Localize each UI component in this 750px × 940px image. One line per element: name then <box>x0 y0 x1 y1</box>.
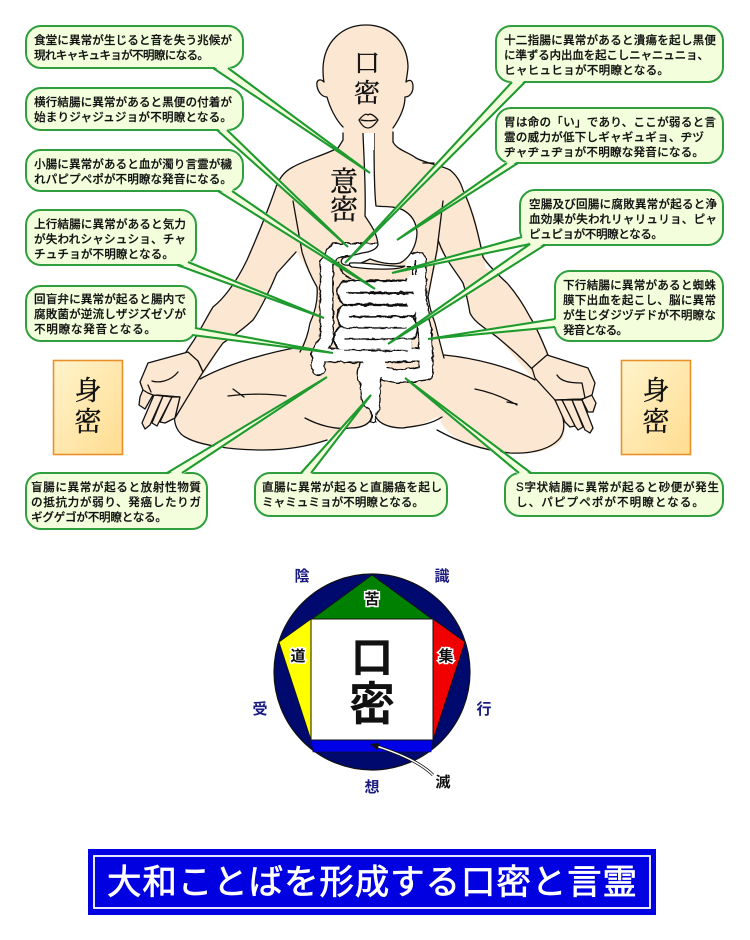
green segment: ku <box>312 575 432 619</box>
five aggregates labels: 受 <box>252 700 268 718</box>
callout: jejunum and ileum <box>388 190 723 344</box>
callout: descending colon: が生じダジヅデドが不明瞭な <box>563 308 716 322</box>
red segment: shu: 集 <box>438 647 454 665</box>
green segment: ku: 苦 <box>364 591 380 608</box>
small intestine center lines <box>345 281 408 351</box>
white square with kumitsu: 密 <box>349 678 395 730</box>
label: imitsu on chest <box>330 166 359 226</box>
callout: ascending colon <box>26 210 324 318</box>
callout: transverse colon: 始まりジャジュジョが不明瞭となる。 <box>34 110 232 124</box>
five aggregates labels: 想 <box>364 779 380 796</box>
callout: ascending colon: が失われシャシュショ、チャ <box>34 232 186 246</box>
callout: sigmoid colon: し、パピプペポが不明瞭となる。 <box>516 495 704 509</box>
seated human figure <box>139 25 596 470</box>
large intestine and small intestine casing <box>318 250 427 377</box>
callout: rectum: ミャミュミョが不明瞭となる。 <box>262 495 424 509</box>
five aggregates labels: 行 <box>476 701 492 718</box>
title banner: 大和ことばを形成する口密と言霊 <box>107 864 637 902</box>
five aggregates labels: 陰 <box>294 567 310 585</box>
panel: left shinmitsu <box>54 360 122 454</box>
callout: rectum: 直腸に異常が起ると直腸癌を起し <box>262 480 442 494</box>
callout: descending colon <box>428 271 723 341</box>
callout: stomach <box>397 108 723 240</box>
label: imitsu on chest: 密 <box>330 194 358 226</box>
white square with kumitsu: 口 <box>351 634 393 681</box>
callout: cecum <box>26 377 327 529</box>
callout: stomach: ヂャヂュヂョが不明瞭な発音になる。 <box>504 145 704 159</box>
callout: stomach: 胃は命の「い」であり、ここが弱ると言 <box>504 115 716 129</box>
five aggregates labels: 識 <box>434 568 450 585</box>
label: metsu: 滅 <box>435 774 451 791</box>
callout: cecum: ギグゲゴが不明瞭となる。 <box>31 510 167 524</box>
lips <box>359 114 378 128</box>
callout: ileocecal valve: 回盲弁に異常が起ると腸内で <box>34 292 186 306</box>
yellow segment: do <box>279 619 311 740</box>
callout: small intestine: 小腸に異常があると血が濁り言霊が穢 <box>34 157 232 171</box>
callout: descending colon: 下行結腸に異常があると蜘蛛 <box>563 278 716 292</box>
callout: jejunum and ileum: 血効果が失われリャリュリョ、ピャ <box>529 212 717 226</box>
callout: ileocecal valve <box>26 286 333 353</box>
callout: cecum: 盲腸に異常が起ると放射性物質 <box>31 480 201 494</box>
callout: sigmoid colon: S字状結腸に異常が起ると砂便が発生 <box>516 480 719 494</box>
five aggregates labels <box>252 567 492 796</box>
callout: cecum: の抵抗力が弱り、発癌したりガ <box>31 495 201 509</box>
white square with kumitsu <box>311 619 433 740</box>
callout: stomach: 霊の威力が低下しギャギュギョ、ヂヅ <box>504 130 704 144</box>
title banner <box>88 849 656 915</box>
red segment: shu <box>433 619 465 740</box>
callout: duodenum: 十二指腸に異常があると潰瘍を起し黒便 <box>504 33 716 47</box>
navy circle <box>274 574 470 770</box>
callout: small intestine: れパピプペポが不明瞭な発音になる。 <box>34 172 232 186</box>
blue segment: metsu <box>311 740 433 752</box>
panel: right shinmitsu: 身 <box>642 376 670 406</box>
panel: right shinmitsu <box>622 360 690 454</box>
callout: duodenum: ヒャヒュヒョが不明瞭となる。 <box>504 63 669 77</box>
label: imitsu on chest: 意 <box>330 166 359 198</box>
rectum <box>357 362 381 422</box>
callout: jejunum and ileum: 空腸及び回腸に腐敗異常が起ると浄 <box>529 197 717 211</box>
callout: esophagus: 現れキャキュキョが不明瞭になる。 <box>34 48 209 62</box>
callout: ascending colon: チュチョが不明瞭となる。 <box>34 247 174 261</box>
diagram: circle and pentagon <box>274 574 470 770</box>
icon: right hand <box>532 355 596 433</box>
label: kumitsu on head: 密 <box>354 79 380 108</box>
digestive tract <box>318 250 427 422</box>
body outline <box>175 25 564 453</box>
callout: rectum <box>255 395 447 516</box>
callout: ileocecal valve: 不明瞭な発音となる。 <box>34 322 156 336</box>
panel: left shinmitsu: 密 <box>74 407 102 437</box>
label: kumitsu on head <box>354 49 380 108</box>
yellow segment: do: 道 <box>290 648 306 665</box>
arrow: metsu pointer <box>370 743 433 775</box>
callout: duodenum: に準ずる内出血を起こしニャニュニョ、 <box>504 48 709 62</box>
callout: small intestine <box>26 150 375 289</box>
callout: descending colon: 発音となる。 <box>563 323 628 337</box>
callout: transverse colon: 横行結腸に異常があると黒便の付着が <box>34 95 232 109</box>
callout: transverse colon <box>26 88 348 247</box>
callout: ascending colon: 上行結腸に異常があると気力 <box>34 217 186 231</box>
callout: sigmoid colon <box>405 378 723 516</box>
armpit gaps <box>202 252 317 378</box>
callout: jejunum and ileum: ピュピョが不明瞭となる。 <box>529 227 663 241</box>
callout: esophagus: 食堂に異常が生じると音を失う兆候が <box>34 33 232 47</box>
panel: left shinmitsu: 身 <box>74 376 102 406</box>
callout: esophagus <box>26 26 370 173</box>
stomach and esophagus <box>341 133 417 269</box>
bottom white gap between legs <box>327 415 470 470</box>
callout: ileocecal valve: 腐敗菌が逆流しザジズゼゾが <box>34 307 186 321</box>
panel: right shinmitsu: 密 <box>642 407 670 437</box>
body silhouette <box>176 25 565 454</box>
callout: descending colon: 膜下出血を起こし、脳に異常 <box>563 293 716 307</box>
icon: left hand <box>139 352 203 429</box>
label: kumitsu on head: 口 <box>354 49 380 78</box>
callout: duodenum <box>345 26 723 263</box>
